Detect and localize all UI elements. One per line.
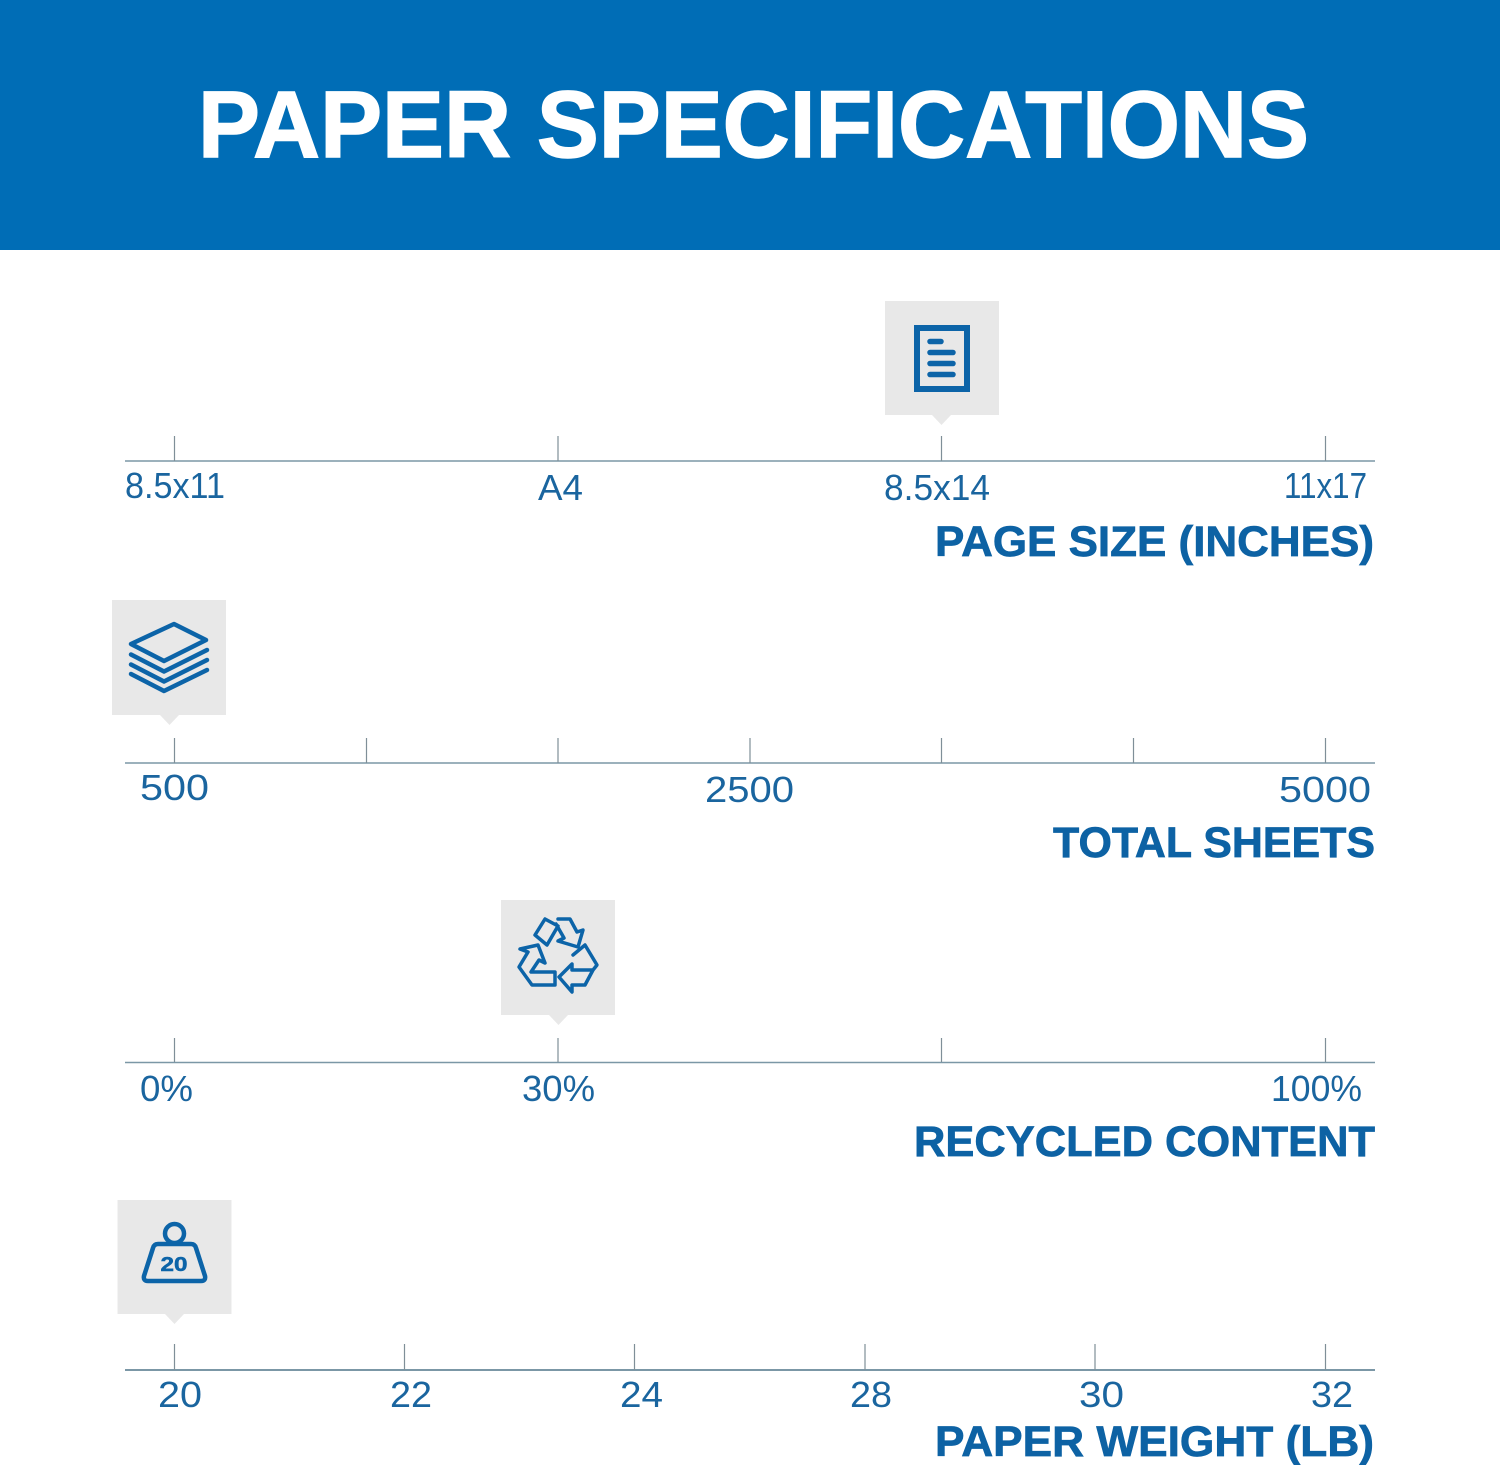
axis: total sheets — [125, 738, 1375, 763]
tick labels: paper weight: 32 — [1311, 1374, 1353, 1415]
marker: recycle icon — [501, 900, 615, 1025]
panel: recycled content — [125, 900, 1375, 1166]
tick labels: page size: 8.5x14 — [884, 467, 990, 508]
panel: total sheets — [112, 600, 1375, 867]
heading: total sheets: TOTAL SHEETS — [1053, 819, 1375, 867]
tick labels: page size: 11x17 — [1284, 465, 1367, 506]
marker: weight icon: 20 — [160, 1254, 188, 1276]
panel: paper weight — [118, 1200, 1375, 1465]
tick labels: paper weight: 24 — [620, 1374, 663, 1415]
tick labels: total sheets: 500 — [140, 767, 209, 808]
tick labels: paper weight: 28 — [850, 1374, 892, 1415]
tick labels: paper weight: 20 — [158, 1374, 202, 1415]
tick labels: page size — [125, 465, 1367, 508]
tick labels: recycled content — [140, 1068, 1362, 1109]
tick labels: paper weight: 22 — [390, 1374, 432, 1415]
tick labels: total sheets — [140, 767, 1371, 810]
title banner — [0, 0, 1500, 250]
axis: page size — [125, 436, 1375, 461]
axis: recycled content — [125, 1038, 1375, 1062]
heading: page size: PAGE SIZE (INCHES) — [935, 518, 1374, 566]
tick labels: paper weight — [158, 1374, 1353, 1415]
tick labels: recycled content: 30% — [522, 1068, 595, 1109]
heading: paper weight: PAPER WEIGHT (LB) — [935, 1418, 1374, 1465]
marker: page icon — [885, 301, 999, 425]
marker: weight icon — [118, 1200, 232, 1324]
tick labels: recycled content: 0% — [140, 1068, 193, 1109]
tick labels: total sheets: 2500 — [705, 769, 794, 810]
tick labels: recycled content: 100% — [1271, 1068, 1362, 1109]
tick labels: total sheets: 5000 — [1279, 769, 1371, 810]
heading: recycled content: RECYCLED CONTENT — [914, 1118, 1375, 1166]
tick labels: paper weight: 30 — [1079, 1374, 1124, 1415]
tick labels: page size: 8.5x11 — [125, 465, 225, 506]
panel: page size — [125, 301, 1375, 566]
axis: paper weight — [125, 1344, 1375, 1370]
marker: paper stack icon — [112, 600, 226, 725]
tick labels: page size: A4 — [538, 467, 583, 508]
title: PAPER SPECIFICATIONS — [198, 72, 1309, 178]
